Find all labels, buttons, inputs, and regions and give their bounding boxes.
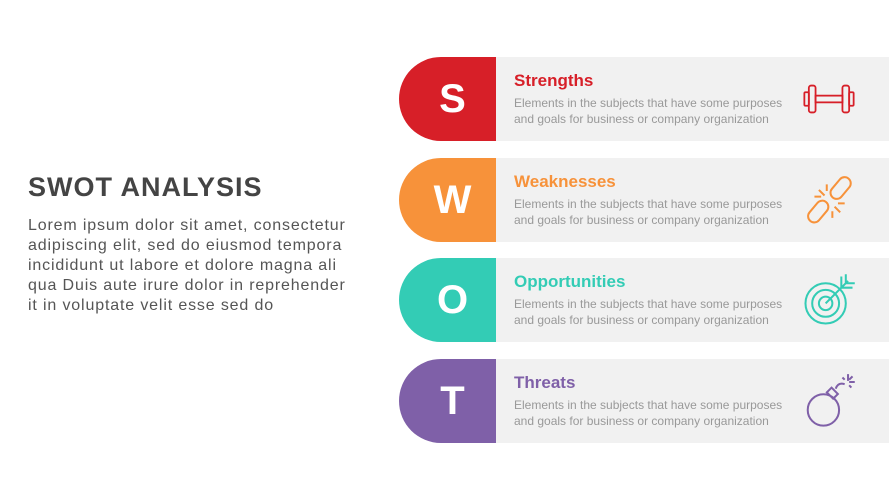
text threats: Elements in the subjects that have some purposes and goals for business or company organization: [514, 398, 782, 428]
text weaknesses: Elements in the subjects that have some purposes and goals for business or company organization: [514, 197, 782, 227]
row: opportunities: [399, 258, 889, 342]
text opportunities: Elements in the subjects that have some purposes and goals for business or company organization: [514, 297, 782, 327]
letter W: W: [434, 178, 471, 222]
letter S: [399, 57, 496, 141]
letter T: [399, 359, 496, 443]
letter S: S: [439, 77, 466, 121]
description text: Lorem ipsum dolor sit amet, consectetur: [28, 217, 346, 234]
description text: incididunt ut labore et dolore magna ali: [28, 257, 337, 274]
icon: broken chain: [807, 176, 852, 224]
letter T: T: [440, 379, 465, 423]
letter O: [399, 258, 496, 342]
description text: qua Duis aute irure dolor in reprehender: [28, 277, 346, 294]
description text: adipiscing elit, sed do eiusmod tempora: [28, 237, 342, 254]
letter W: [399, 158, 496, 242]
icon: bomb: [806, 374, 855, 427]
heading threats: Threats: [514, 373, 575, 392]
icon: dumbbell: [803, 84, 855, 114]
description text: [28, 217, 346, 314]
heading opportunities: Opportunities: [514, 272, 625, 291]
row: strengths: [399, 57, 889, 141]
letter O: O: [437, 278, 468, 322]
icon: target: [804, 274, 855, 324]
description text: it in voluptate velit esse sed do: [28, 297, 274, 314]
title: SWOT ANALYSIS: [28, 172, 263, 202]
row: threats: [399, 359, 889, 443]
row: weaknesses: [399, 158, 889, 242]
heading weaknesses: Weaknesses: [514, 172, 616, 191]
text strengths: Elements in the subjects that have some purposes and goals for business or company organization: [514, 96, 782, 126]
heading strengths: Strengths: [514, 71, 593, 90]
